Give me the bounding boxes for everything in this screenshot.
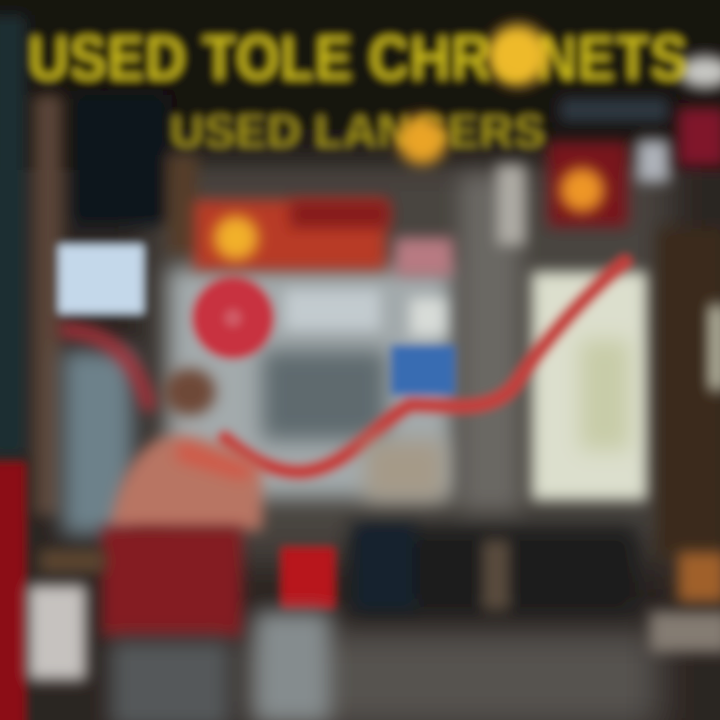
left column bbox=[0, 15, 198, 515]
left red line bbox=[60, 330, 150, 410]
right white panel bbox=[532, 272, 647, 500]
person bbox=[40, 368, 262, 720]
hand highlight bbox=[365, 440, 445, 500]
window light left bbox=[58, 244, 144, 314]
lower left window bbox=[62, 350, 134, 535]
central panel bbox=[168, 165, 525, 510]
subtitle: USED LANGERS bbox=[170, 105, 545, 157]
white block lower left bbox=[28, 585, 86, 680]
red column bottom left bbox=[0, 462, 26, 720]
red trend line bbox=[225, 262, 625, 472]
orange red banner bbox=[194, 200, 453, 276]
pale legs below box bbox=[255, 612, 330, 720]
red box bbox=[281, 547, 335, 609]
blue and pale boxes bbox=[391, 298, 455, 395]
dark figure bbox=[355, 525, 415, 610]
red circle icon bbox=[192, 277, 274, 359]
top right signs bbox=[548, 56, 720, 227]
right column bbox=[650, 228, 720, 652]
